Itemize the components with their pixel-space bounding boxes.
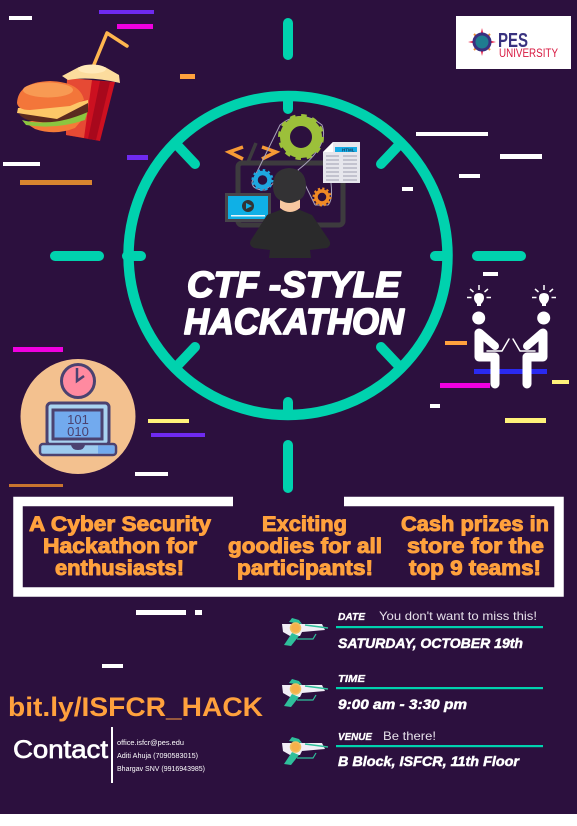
html document bbox=[323, 142, 360, 183]
icon: hacker at a computer bbox=[225, 116, 360, 258]
text: goodies bbox=[228, 512, 382, 580]
event: date bbox=[336, 609, 543, 651]
video player bbox=[225, 193, 271, 222]
straw bbox=[93, 33, 127, 67]
text: cash prizes: Cash prizes in bbox=[401, 512, 549, 536]
event: venue: VENUE bbox=[338, 731, 373, 743]
title: HACKATHON bbox=[184, 301, 405, 342]
event: time: 9:00 am - 3:30 pm bbox=[338, 696, 467, 712]
event: date: DATE bbox=[338, 611, 366, 623]
green gear bbox=[280, 116, 322, 158]
text: cash prizes: store for the bbox=[407, 534, 544, 558]
monitor bbox=[238, 163, 343, 225]
clock bbox=[62, 364, 94, 398]
title bbox=[184, 264, 405, 342]
event: date: SATURDAY, OCTOBER 19th bbox=[338, 635, 523, 651]
decorative dashes: upper left bbox=[3, 10, 195, 185]
right light bulb bbox=[532, 285, 556, 306]
left light bulb bbox=[467, 285, 491, 306]
event: venue: Be there! bbox=[383, 729, 436, 743]
laptop bbox=[40, 403, 116, 455]
icon: blaster gun, date bbox=[282, 618, 328, 646]
event: venue bbox=[336, 729, 543, 769]
contact block: Bhargav SNV (9916943985) bbox=[117, 766, 205, 773]
text: cyber security: enthusiasts! bbox=[55, 556, 184, 580]
logo: PES University bbox=[456, 16, 571, 69]
icon: blaster gun, time bbox=[282, 679, 328, 707]
lid bbox=[62, 67, 120, 83]
code brackets bbox=[229, 143, 276, 162]
event: date: You don't want to miss this! bbox=[379, 609, 537, 623]
right person bbox=[513, 312, 550, 384]
text: cyber security: Hackathon for bbox=[43, 534, 198, 558]
text: goodies: participants! bbox=[237, 556, 373, 580]
icon: burger and drink bbox=[17, 33, 127, 141]
logo: PES University: PES bbox=[498, 30, 528, 52]
text: goodies: goodies for all bbox=[228, 534, 382, 558]
laptop: 010 bbox=[67, 424, 89, 439]
decorative dashes: right bbox=[402, 132, 569, 423]
orange gear bbox=[314, 188, 330, 206]
title: CTF -STYLE bbox=[187, 264, 401, 305]
gear chain bbox=[252, 116, 332, 205]
panel: highlights bbox=[18, 502, 559, 592]
text: cash prizes: top 9 teams! bbox=[409, 556, 541, 580]
laptop: 101 bbox=[67, 412, 89, 427]
text: goodies: Exciting bbox=[262, 512, 347, 536]
logo: PES University: UNIVERSITY bbox=[499, 46, 558, 60]
contact block: Contact bbox=[13, 736, 108, 764]
html document: HTML bbox=[342, 148, 355, 152]
icon: two people on laptops bbox=[467, 285, 556, 384]
blue gear bbox=[252, 170, 272, 190]
compass emblem bbox=[468, 28, 496, 56]
contact block: Aditi Ahuja (7090583015) bbox=[117, 753, 198, 760]
crosshair target ring bbox=[55, 23, 521, 488]
contact block: office.isfcr@pes.edu bbox=[117, 740, 184, 747]
registration link: bit.ly/ISFCR_HACK bbox=[8, 692, 264, 722]
cup bbox=[66, 78, 115, 141]
white frame bbox=[18, 502, 559, 592]
event: time bbox=[336, 673, 543, 712]
event: venue: B Block, ISFCR, 11th Floor bbox=[338, 753, 521, 769]
decorative dashes: left middle bbox=[9, 347, 205, 487]
person bbox=[250, 168, 330, 258]
burger bbox=[24, 114, 87, 132]
left person bbox=[472, 312, 509, 384]
icon: blaster gun, venue bbox=[282, 737, 328, 765]
contact block bbox=[13, 727, 205, 783]
text: cyber security: A Cyber Security bbox=[29, 512, 211, 536]
text: cyber security bbox=[29, 512, 211, 580]
event: time: TIME bbox=[338, 673, 366, 685]
text: cash prizes bbox=[401, 512, 549, 580]
icon: laptop with clock bbox=[20, 359, 136, 474]
decorative dashes: lower left bbox=[102, 610, 202, 668]
